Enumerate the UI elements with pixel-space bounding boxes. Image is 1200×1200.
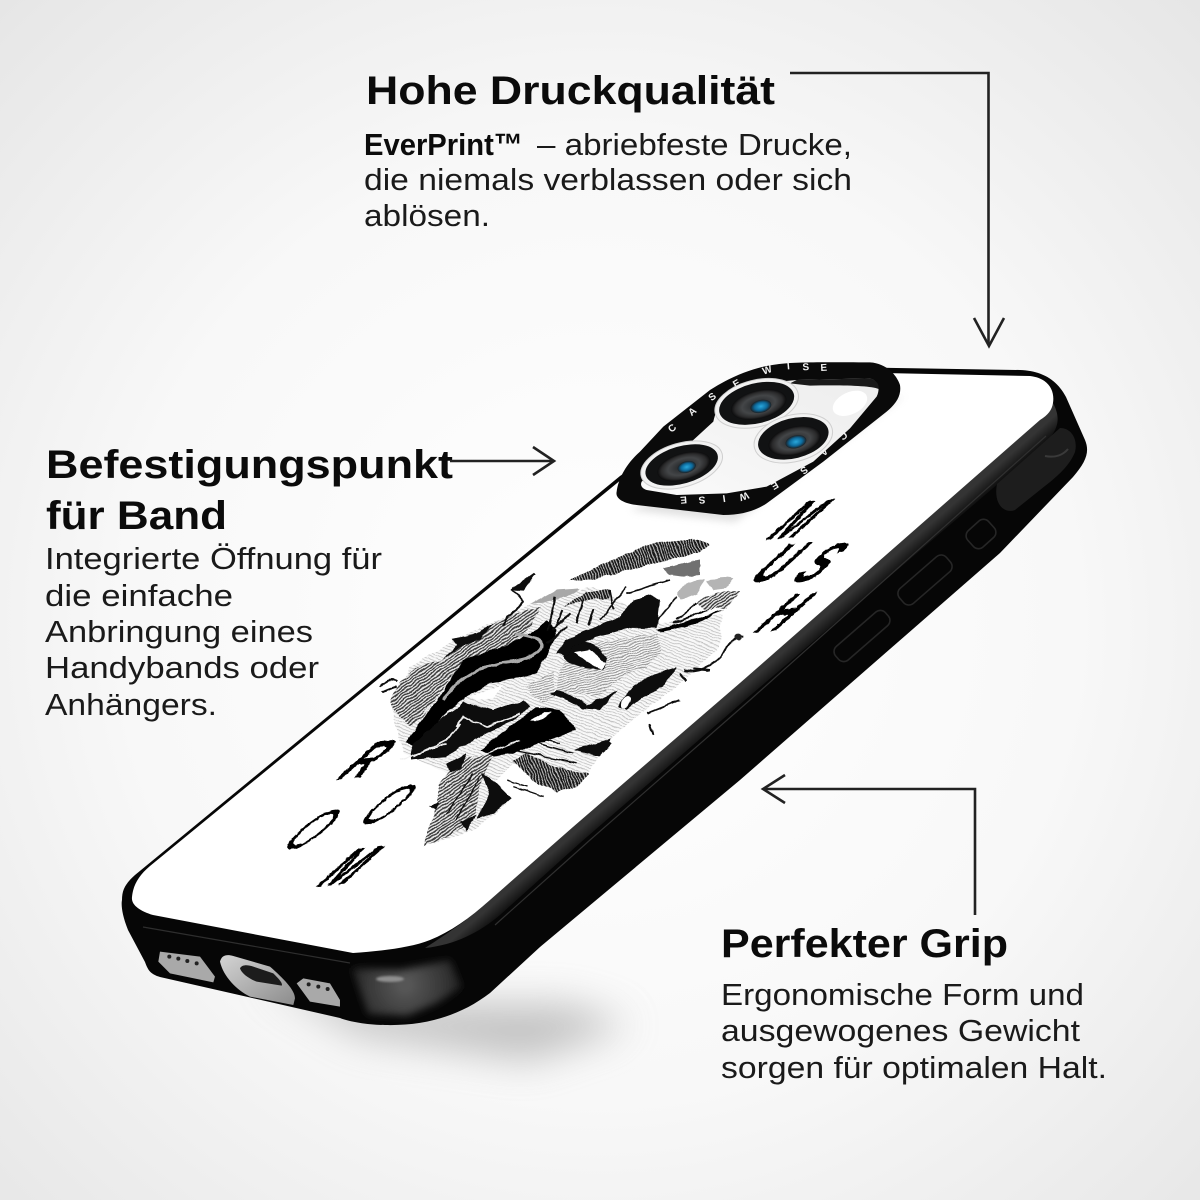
description: Ergonomische Form und <box>721 977 1084 1012</box>
lightning lines <box>413 700 530 757</box>
top mushroom cap <box>568 538 710 582</box>
drip flame <box>512 573 535 591</box>
skull artwork <box>380 538 743 847</box>
black streak <box>657 610 723 632</box>
camera module <box>616 361 900 515</box>
stems <box>600 580 707 623</box>
fan gills <box>527 672 555 703</box>
letter O: O <box>340 772 439 837</box>
right speaker holes <box>307 982 330 991</box>
small caps <box>532 588 580 603</box>
ring label bottom: CASEWISE <box>679 429 849 505</box>
small eye <box>530 713 552 721</box>
letter R: R <box>320 727 417 792</box>
letter U: U <box>732 530 829 595</box>
corner gloss <box>352 960 462 1016</box>
arrow: grip <box>763 775 975 915</box>
right socket <box>618 667 677 710</box>
dark region right <box>480 707 577 757</box>
teeth lower <box>477 773 512 818</box>
right speaker <box>297 978 340 1007</box>
teeth upper <box>512 753 588 792</box>
heading <box>46 443 453 538</box>
corner highlight <box>376 976 404 982</box>
lens right <box>749 406 838 471</box>
mute switch panel <box>996 428 1076 511</box>
jaw hatching <box>423 753 493 847</box>
port opening <box>240 965 282 986</box>
nose highlight <box>575 650 605 670</box>
tendril bud <box>735 634 742 641</box>
cheek hatching <box>390 658 463 727</box>
heading: für Band <box>46 494 227 538</box>
jaw dark shard <box>573 740 612 757</box>
arrow: print quality <box>790 73 1004 346</box>
top inner shadow <box>790 378 879 389</box>
lettering ROOM <box>264 727 439 899</box>
skull light base <box>392 587 722 847</box>
side buttons <box>831 516 999 664</box>
drip <box>503 573 535 627</box>
letter M: M <box>750 486 852 552</box>
lower jaw strokes <box>447 733 610 820</box>
jaw dark shard <box>428 753 477 832</box>
letter O: O <box>264 797 363 862</box>
torn edge black <box>442 623 493 661</box>
ring label top: CASEWISE <box>666 361 828 435</box>
flash <box>829 386 871 421</box>
description: ausgewogenes Gewicht <box>721 1013 1080 1048</box>
cheek stipple <box>557 633 660 697</box>
left speaker <box>158 952 215 982</box>
description <box>721 977 1107 1085</box>
description <box>45 541 382 722</box>
callout: grip <box>721 922 1107 1085</box>
description: ablösen. <box>364 198 490 233</box>
description: die niemals verblassen oder sich <box>364 162 852 197</box>
left speaker holes <box>167 955 199 965</box>
letter S: S <box>774 530 869 595</box>
switch glint <box>1045 449 1068 457</box>
streaks <box>400 707 520 760</box>
phone shadow <box>260 975 630 1060</box>
letter M: M <box>300 833 402 899</box>
description: Integrierte Öffnung für <box>45 541 382 576</box>
description: Handybands oder <box>45 650 319 685</box>
charging port <box>220 955 295 1005</box>
skull lower part <box>392 587 722 847</box>
small dark cap <box>663 560 700 577</box>
description: die einfache <box>45 578 233 613</box>
description: Anhängers. <box>45 687 217 722</box>
tendrils <box>647 637 743 735</box>
heading: Befestigungspunkt <box>46 443 453 487</box>
description: sorgen für optimalen Halt. <box>721 1050 1107 1085</box>
description: – abriebfeste Drucke, <box>537 127 852 162</box>
upper dark mass <box>557 595 660 657</box>
lettering MUSH <box>732 486 869 645</box>
white eye <box>470 685 503 700</box>
side groove <box>495 436 1046 925</box>
curl left <box>380 680 398 693</box>
white back face <box>132 373 1053 953</box>
callout: strap attachment <box>45 443 453 722</box>
heading: Hohe Druckqualität <box>366 69 775 113</box>
callout: print quality <box>364 69 852 233</box>
heading: Perfekter Grip <box>721 922 1008 966</box>
letter H: H <box>737 580 834 645</box>
dark cap <box>563 590 610 607</box>
pale skull right <box>660 613 722 663</box>
stems <box>547 597 593 643</box>
camera ring <box>616 362 900 515</box>
bottom ports <box>158 952 340 1007</box>
description: Anbringung eines <box>45 614 313 649</box>
bottom groove <box>143 927 350 963</box>
camera window <box>641 378 879 495</box>
socket highlight <box>619 693 633 710</box>
wavy pale line <box>443 633 542 700</box>
case body <box>122 366 1087 1025</box>
lens left <box>635 432 728 498</box>
skull right part <box>550 538 743 757</box>
cheek contour <box>550 690 617 710</box>
arrow: strap attachment <box>450 447 554 475</box>
lower left shards <box>410 700 530 760</box>
cap gills right <box>697 591 740 610</box>
dark around nose <box>563 642 607 670</box>
black band <box>405 620 557 747</box>
phone case <box>122 361 1087 1025</box>
skull left part <box>380 573 610 760</box>
side bevel <box>425 403 1058 948</box>
description: EverPrint™ <box>364 127 523 162</box>
lens top <box>710 370 804 436</box>
mid caps <box>677 577 733 600</box>
description <box>364 127 852 233</box>
camera shadow <box>630 395 905 522</box>
torn upper hatching <box>443 608 540 662</box>
